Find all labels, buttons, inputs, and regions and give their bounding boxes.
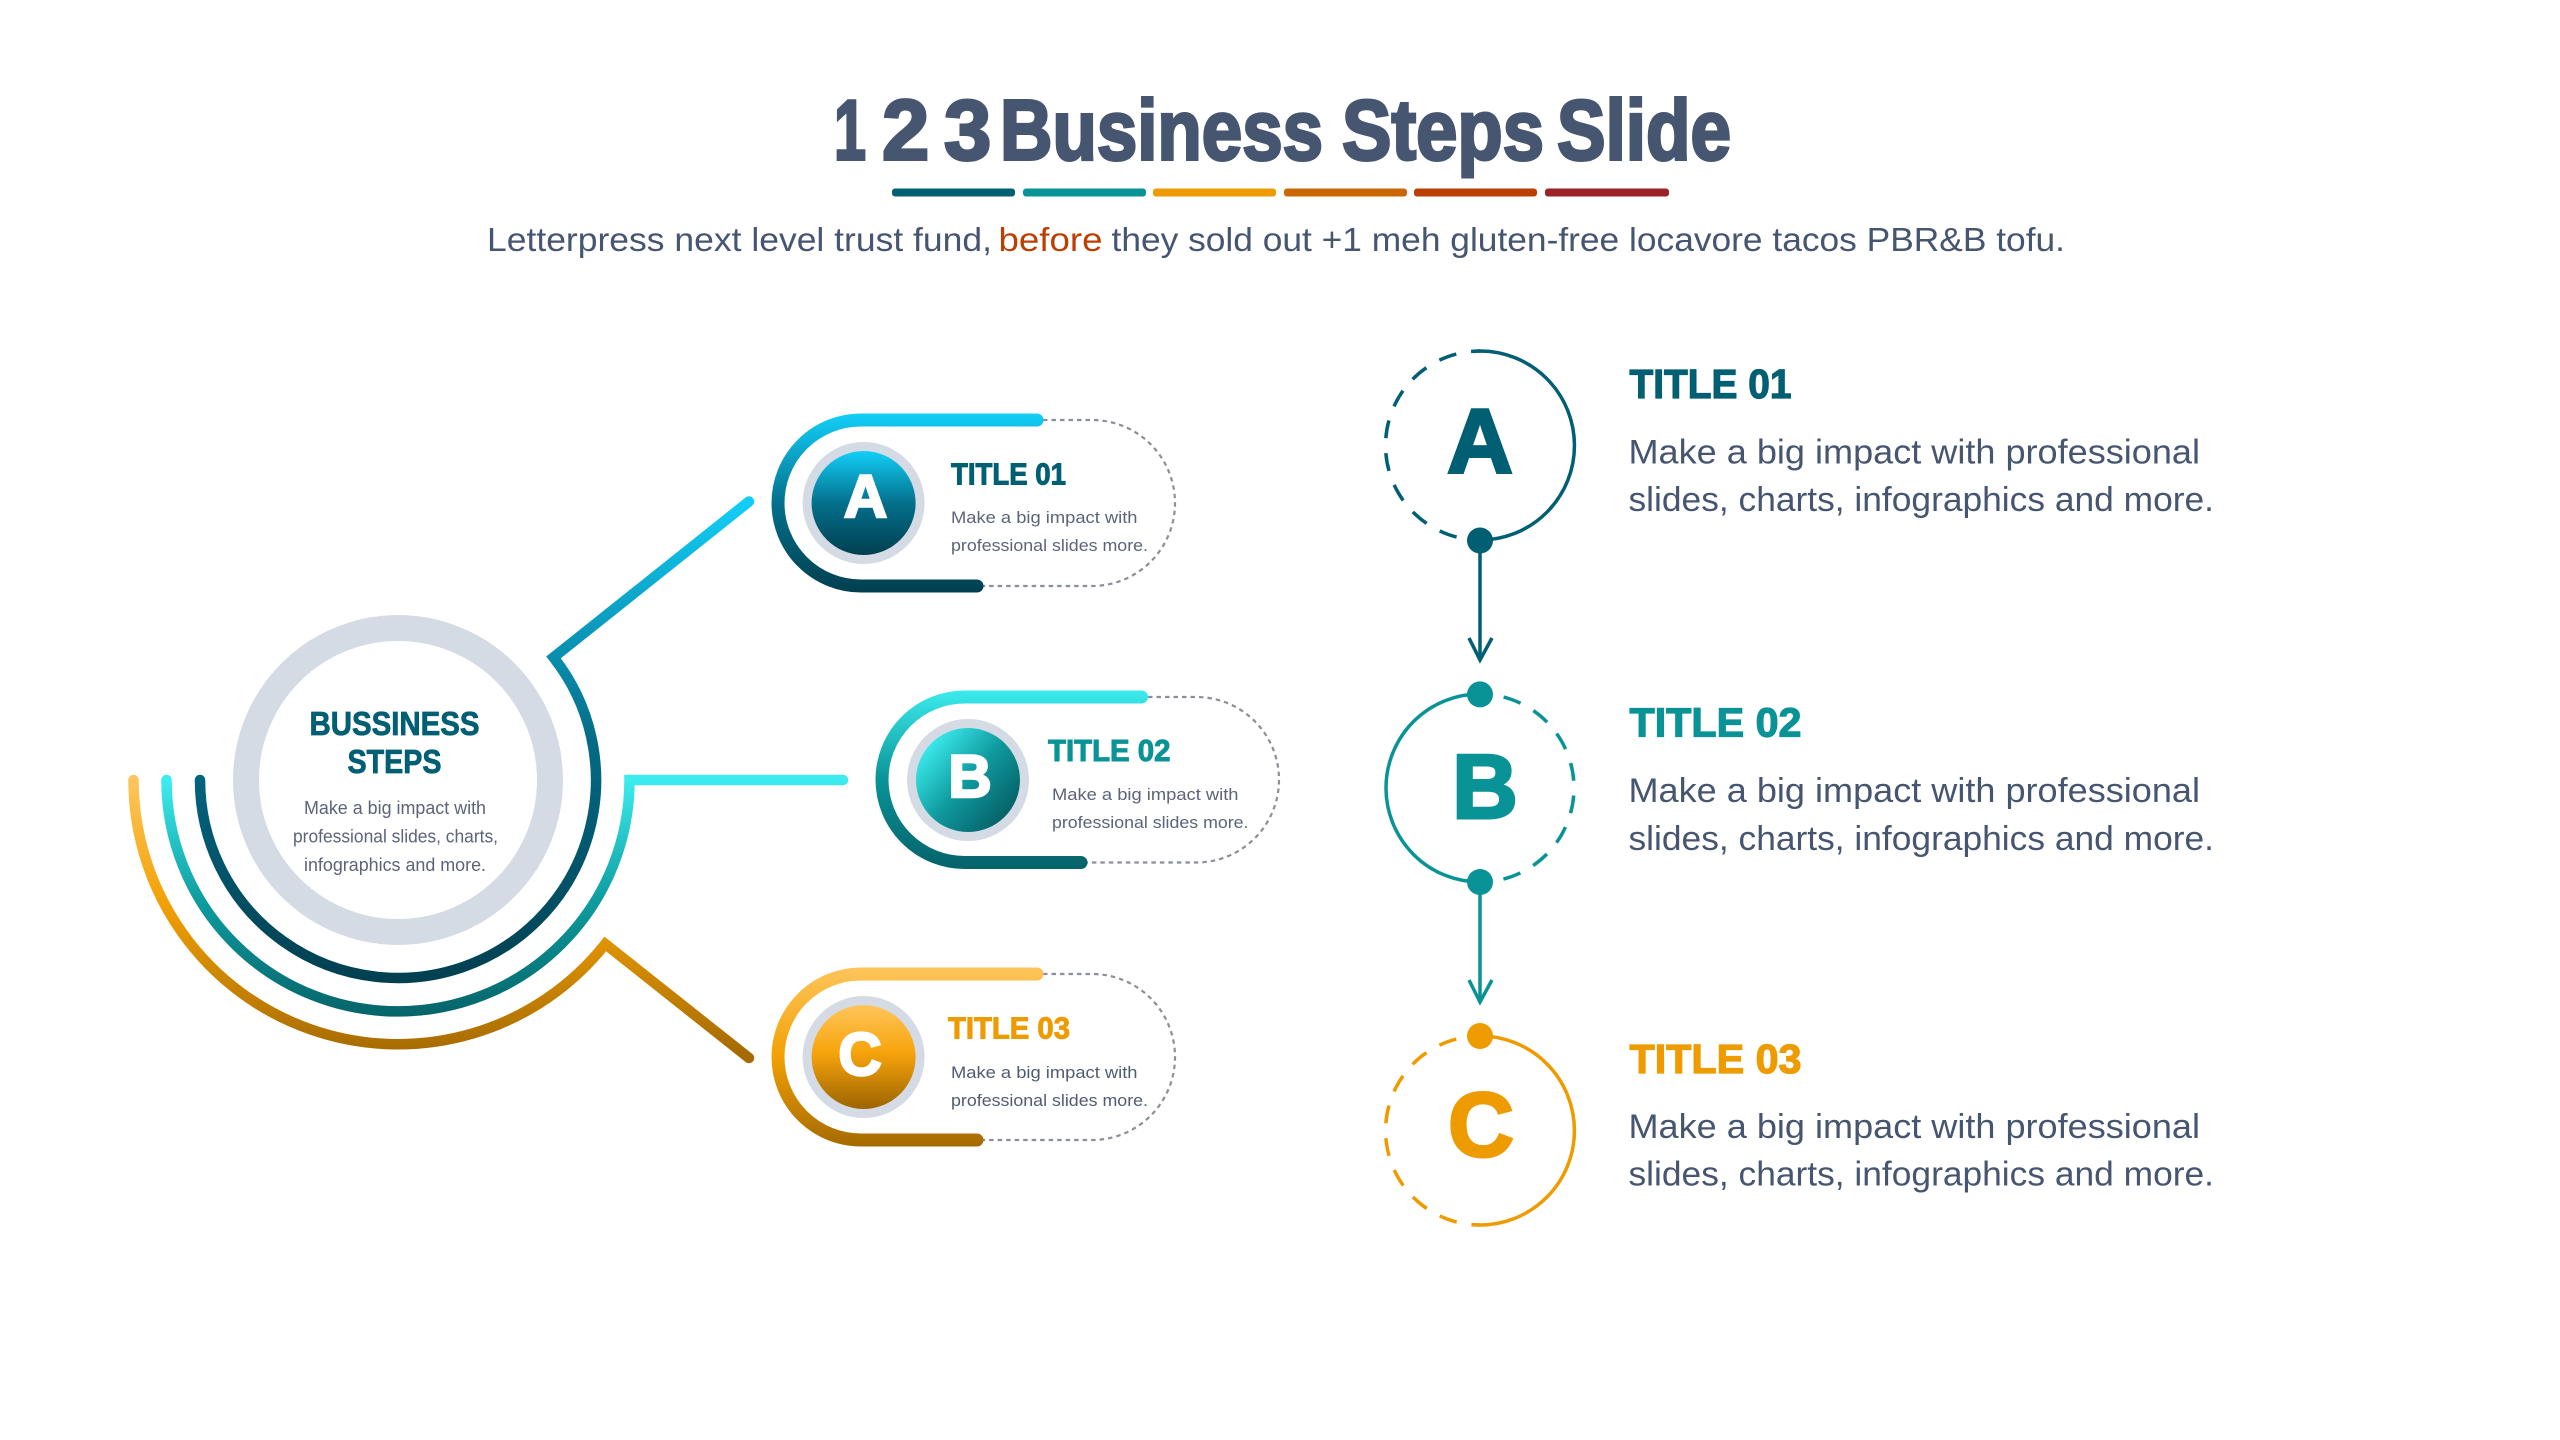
centre description: Make a big impact with <box>304 798 486 818</box>
step A text <box>1628 434 2214 519</box>
grey centre ring <box>246 628 550 932</box>
card A dashed outline <box>983 420 1175 586</box>
dot and arrow B to C <box>1467 869 1493 1002</box>
card B title: TITLE 02 <box>1048 733 1170 768</box>
panel: card A <box>778 420 1175 586</box>
card B dashed outline <box>1087 697 1279 862</box>
card B text <box>1052 785 1248 832</box>
card A text: Make a big impact with <box>951 508 1138 527</box>
title: Steps <box>1342 84 1544 178</box>
title: 3 <box>944 84 991 178</box>
step C text: Make a big impact with professional <box>1628 1108 2200 1146</box>
icon: badge A <box>803 442 925 564</box>
card B text: Make a big impact with <box>1052 785 1238 804</box>
card C dashed outline <box>983 974 1175 1140</box>
centre heading: STEPS <box>348 743 442 780</box>
step A title: TITLE 01 <box>1630 361 1792 407</box>
card C text: professional slides more. <box>951 1091 1148 1110</box>
centre description <box>293 798 498 875</box>
card B text: professional slides more. <box>1052 813 1248 832</box>
icon: badge C <box>803 996 925 1118</box>
title: 1 <box>834 84 866 178</box>
panel: step A <box>1386 351 2214 660</box>
title underline colour bars <box>892 188 1669 196</box>
step B text: Make a big impact with professional <box>1628 772 2200 810</box>
subtitle: they sold out +1 meh gluten-free locavore tacos PBR&B tofu. <box>1112 221 2065 258</box>
step C text: slides, charts, infographics and more. <box>1628 1156 2214 1194</box>
step C top dot <box>1467 1023 1493 1049</box>
icon: circle C solid half <box>1472 1036 1574 1225</box>
step B text: slides, charts, infographics and more. <box>1628 820 2214 858</box>
icon: badge A: A <box>844 463 887 530</box>
title: Slide <box>1557 84 1731 178</box>
card C text <box>951 1063 1148 1110</box>
subtitle: before <box>998 221 1102 258</box>
icon: badge B <box>907 719 1029 841</box>
centre description: professional slides, charts, <box>293 826 498 846</box>
panel: card B <box>882 697 1279 862</box>
icon: circle A solid half <box>1473 351 1574 540</box>
card C title: TITLE 03 <box>948 1010 1070 1046</box>
icon: circle B dashed half <box>1480 694 1574 882</box>
title: Business <box>1000 84 1323 178</box>
icon: circle C dashed half <box>1386 1036 1480 1225</box>
step B letter: B <box>1452 737 1518 838</box>
title <box>834 84 1731 178</box>
centre description: infographics and more. <box>304 855 486 875</box>
panel: card C <box>778 974 1175 1140</box>
centre heading: BUSSINESS <box>310 705 480 742</box>
panel: central business steps diagram <box>134 502 843 1058</box>
card C text: Make a big impact with <box>951 1063 1138 1082</box>
card B bracket <box>882 697 1142 862</box>
icon: badge C: C <box>838 1021 882 1088</box>
panel: step B <box>1386 681 2214 1002</box>
icon: badge B: B <box>948 743 992 810</box>
card A title: TITLE 01 <box>951 456 1066 492</box>
step A letter: A <box>1447 392 1513 492</box>
title: 2 <box>882 84 929 178</box>
icon: circle B solid half <box>1386 694 1480 882</box>
card A bracket <box>778 420 1037 586</box>
card C bracket <box>778 974 1037 1140</box>
card A text: professional slides more. <box>951 536 1148 555</box>
step A text: slides, charts, infographics and more. <box>1628 481 2214 519</box>
centre heading <box>310 705 480 780</box>
step B top dot <box>1467 681 1493 707</box>
step A text: Make a big impact with professional <box>1628 434 2200 472</box>
dot and arrow A to B <box>1467 528 1493 660</box>
subtitle: Letterpress next level trust fund, <box>487 221 992 258</box>
connector arc to card C <box>134 780 749 1058</box>
subtitle <box>487 221 2065 258</box>
card A text <box>951 508 1148 555</box>
icon: circle A dashed half <box>1386 351 1480 540</box>
connector arc to card B <box>166 780 843 1011</box>
step B text <box>1628 772 2214 858</box>
step C letter: C <box>1448 1075 1514 1176</box>
step B title: TITLE 02 <box>1630 700 1802 746</box>
connector arc to card A <box>200 502 749 978</box>
panel: step C <box>1386 1023 2214 1225</box>
step C title: TITLE 03 <box>1630 1036 1802 1082</box>
step C text <box>1628 1108 2214 1194</box>
